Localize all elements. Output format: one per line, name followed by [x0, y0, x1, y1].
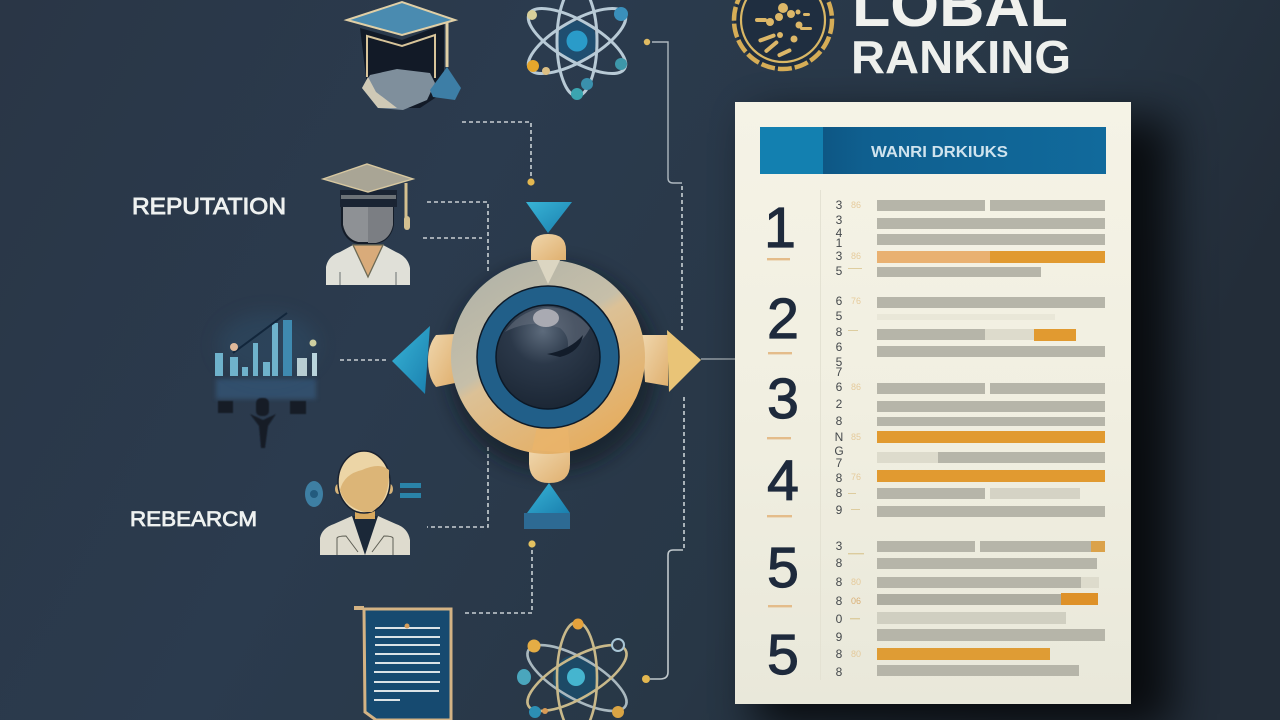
hub lens [496, 305, 600, 409]
faint orange labels: 76 [851, 472, 861, 482]
medal logo [734, 0, 832, 69]
small labels: 5 [836, 264, 843, 278]
connector lines [340, 39, 735, 683]
small labels: 7 [836, 456, 843, 470]
sheet header [760, 127, 1106, 174]
bars: last rank [877, 612, 1105, 676]
faint orange labels: 86 [851, 382, 861, 392]
bars: rank 5 [877, 541, 1105, 605]
small labels: 8 [836, 556, 843, 570]
small labels: 4 [836, 226, 843, 240]
rank underlines [767, 258, 792, 607]
icon: graduate with cap [323, 164, 413, 285]
icon: researcher [305, 451, 421, 555]
hub bottom arrow [524, 450, 570, 529]
sheet header: WANRI DRKIUKS [871, 144, 1008, 161]
small labels: 8 [836, 575, 843, 589]
icon: document [354, 606, 451, 720]
icon: bar chart with silhouettes [215, 313, 318, 448]
icon: graduation cap top [347, 2, 461, 110]
bars: rank 3 [877, 383, 1105, 443]
icon: atom top [519, 0, 635, 100]
hub left arrow [392, 326, 455, 394]
small labels: 8 [836, 325, 843, 339]
small labels: 8 [836, 486, 843, 500]
hub top arrow [526, 202, 572, 260]
small labels: 5 [836, 355, 843, 369]
icon: atom bottom [517, 618, 635, 720]
faint orange labels: 85 [851, 432, 861, 442]
small labels: 8 [836, 594, 843, 608]
small labels: 6 [836, 294, 843, 308]
small labels: 3 [836, 539, 843, 553]
rank numbers: 2 [767, 287, 799, 351]
small labels: 8 [836, 647, 843, 661]
small labels: 6 [836, 340, 843, 354]
bars: rank 2 [877, 297, 1105, 357]
rank numbers: 5 [767, 536, 799, 600]
small labels: 3 [836, 213, 843, 227]
small labels [834, 198, 844, 679]
small labels: G [834, 444, 844, 458]
bars: rank 1 [877, 200, 1105, 277]
title: RANKING [851, 31, 1071, 83]
label: reputation: REPUTATION [132, 193, 286, 219]
label: research: REBEARCM [130, 508, 257, 531]
small labels: 9 [836, 630, 843, 644]
small labels: 3 [836, 249, 843, 263]
bars: rank 4 [877, 452, 1105, 517]
title [851, 0, 1071, 83]
small labels: 7 [836, 365, 843, 379]
faint orange labels: 80 [851, 577, 861, 587]
small labels: N [835, 430, 843, 444]
small labels: 5 [836, 309, 843, 323]
faint orange labels: 86 [851, 251, 861, 261]
central hub [392, 202, 701, 529]
small labels: 6 [836, 380, 843, 394]
rank numbers: 3 [767, 367, 799, 431]
rank numbers [764, 196, 799, 687]
small labels: 9 [836, 503, 843, 517]
small labels: 0 [836, 612, 843, 626]
small labels: 8 [836, 665, 843, 679]
faint orange labels: 06 [851, 596, 861, 606]
panel: ranking sheet [735, 102, 1131, 704]
rank numbers: 1 [764, 196, 796, 260]
hub ring [451, 260, 645, 454]
small labels: 3 [836, 198, 843, 212]
small labels: 1 [836, 236, 843, 250]
faint orange labels: 86 [851, 200, 861, 210]
small labels: 8 [836, 471, 843, 485]
rank numbers: 4 [767, 449, 799, 513]
rank numbers: 5 [767, 623, 799, 687]
faint orange labels: 80 [851, 649, 861, 659]
faint orange labels: 76 [851, 296, 861, 306]
small labels: 8 [836, 414, 843, 428]
faint orange labels [851, 200, 861, 659]
hub right arrow [642, 330, 701, 392]
small labels: 2 [836, 397, 843, 411]
